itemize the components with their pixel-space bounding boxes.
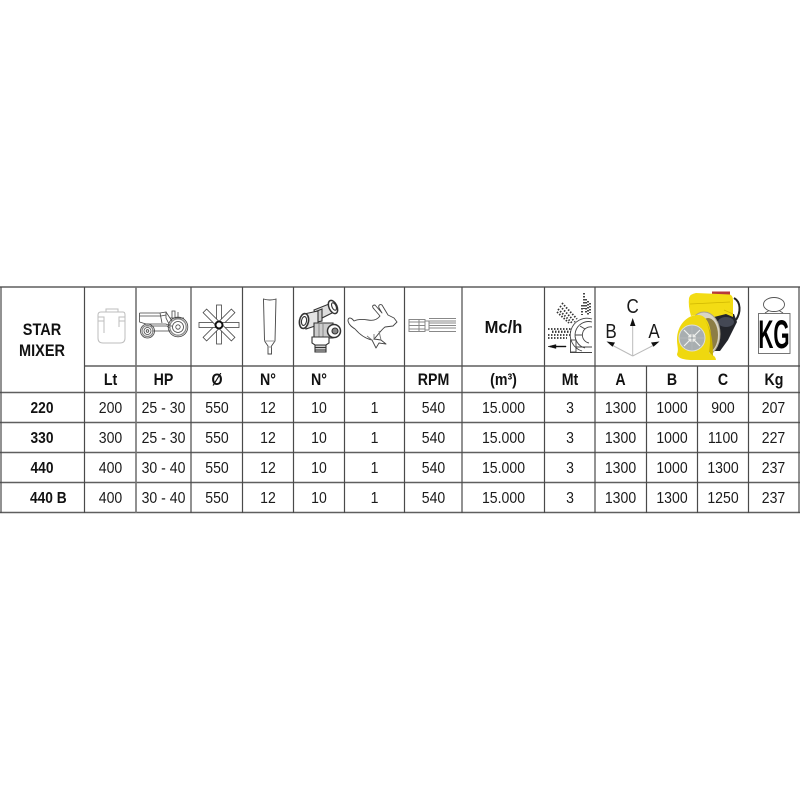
row: 220: 15.000 xyxy=(482,399,525,417)
fan housing and arrow xyxy=(570,318,592,352)
row: 220: 10 xyxy=(311,399,327,417)
row: 440 B: 1 xyxy=(371,489,378,507)
row: 440 B: 12 xyxy=(260,489,276,507)
row: 440: 1 xyxy=(371,459,378,477)
row: 440: 30 - 40 xyxy=(142,459,185,477)
row: 440: 1300 xyxy=(707,459,739,477)
row: 440 B: 30 - 40 xyxy=(142,489,185,507)
icon: lance tube xyxy=(264,299,276,354)
icon: dimension axes: A xyxy=(648,320,660,342)
row: 220: 540 xyxy=(422,399,445,417)
unit header row: Mt xyxy=(562,371,578,389)
row: 440: 3 xyxy=(566,459,574,477)
row: 220: 25 - 30 xyxy=(142,399,185,417)
row: 220: 200 xyxy=(99,399,122,417)
row: 330 xyxy=(31,429,785,447)
translucent flange xyxy=(688,312,720,356)
row: 220: 1300 xyxy=(605,399,636,417)
icon: dimension axes: C xyxy=(627,295,639,317)
row: 440: 12 xyxy=(260,459,276,477)
table grid xyxy=(0,287,800,513)
row: 330: 330 xyxy=(31,429,53,447)
row: 440 B: 3 xyxy=(566,489,574,507)
row: 220: 12 xyxy=(260,399,276,417)
icon: spray pattern xyxy=(548,293,592,352)
unit header row: Kg xyxy=(765,371,783,389)
row: 330: 300 xyxy=(99,429,122,447)
title: STAR MIXER: MIXER xyxy=(19,342,65,360)
row: 220: 900 xyxy=(711,399,735,417)
icon: PTO shaft xyxy=(409,318,456,332)
unit header row: N° xyxy=(260,371,276,389)
row: 220: 220 xyxy=(31,399,53,417)
unit header row: Ø xyxy=(211,371,223,389)
row: 220: 550 xyxy=(205,399,229,417)
unit header row xyxy=(104,371,783,389)
row: 330: 540 xyxy=(422,429,445,447)
row: 330: 25 - 30 xyxy=(142,429,185,447)
row: 440 B xyxy=(30,489,785,507)
row: 220: 207 xyxy=(762,399,785,417)
icon: fan xyxy=(199,305,239,344)
row: 440 B: 550 xyxy=(205,489,229,507)
row: 440: 1300 xyxy=(605,459,636,477)
row: 440: 550 xyxy=(205,459,229,477)
row: 220: 1 xyxy=(371,399,378,417)
row: 330: 10 xyxy=(311,429,327,447)
heading: Mc/h: Mc/h xyxy=(485,316,522,337)
tank xyxy=(689,293,733,322)
icon: tractor xyxy=(140,311,188,338)
row: 440 xyxy=(31,459,785,477)
row: 220 xyxy=(31,399,785,417)
fan lens xyxy=(679,325,705,351)
row: 440: 1000 xyxy=(656,459,688,477)
spray dots xyxy=(548,293,590,338)
icon: dimension axes xyxy=(605,295,660,356)
row: 330: 1000 xyxy=(656,429,688,447)
row: 440 B: 1300 xyxy=(605,489,636,507)
row: 440: 400 xyxy=(99,459,122,477)
row: 440: 540 xyxy=(422,459,445,477)
row: 440 B: 1300 xyxy=(656,489,688,507)
row: 440: 440 xyxy=(31,459,53,477)
title: STAR MIXER xyxy=(19,321,65,360)
unit header row: C xyxy=(718,371,728,389)
row: 330: 3 xyxy=(566,429,574,447)
row: 440 B: 15.000 xyxy=(482,489,525,507)
row: 440 B: 400 xyxy=(99,489,122,507)
row: 440: 15.000 xyxy=(482,459,525,477)
unit header row: RPM xyxy=(418,371,449,389)
row: 440 B: 540 xyxy=(422,489,445,507)
icon: dimension axes: B xyxy=(605,320,617,342)
row: 440 B: 237 xyxy=(762,489,785,507)
row: 440 B: 1250 xyxy=(707,489,739,507)
icon: weight KG: KG xyxy=(758,312,790,357)
row: 330: 550 xyxy=(205,429,229,447)
unit header row: A xyxy=(615,371,626,389)
row: 220: 1000 xyxy=(656,399,688,417)
red cap xyxy=(712,292,730,294)
row: 440: 10 xyxy=(311,459,327,477)
unit header row: Lt xyxy=(104,371,117,389)
row: 330: 227 xyxy=(762,429,785,447)
row: 440 B: 440 B xyxy=(30,489,67,507)
icon: valve xyxy=(298,299,340,352)
row: 330: 1 xyxy=(371,429,378,447)
yellow shroud xyxy=(677,315,716,360)
hose and black pump xyxy=(734,298,740,320)
row: 330: 12 xyxy=(260,429,276,447)
product photo: yellow sprayer xyxy=(677,292,740,360)
icon: hare xyxy=(348,305,397,348)
unit header row: (m³) xyxy=(490,371,517,389)
unit header row: N° xyxy=(311,371,327,389)
row: 220: 3 xyxy=(566,399,574,417)
row: 330: 15.000 xyxy=(482,429,525,447)
unit header row: HP xyxy=(154,371,173,389)
row: 440 B: 10 xyxy=(311,489,327,507)
icon: tank xyxy=(98,309,125,343)
row: 440: 237 xyxy=(762,459,785,477)
title: STAR MIXER: STAR xyxy=(23,321,61,339)
unit header row: B xyxy=(667,371,677,389)
row: 330: 1100 xyxy=(708,429,738,447)
row: 330: 1300 xyxy=(605,429,636,447)
